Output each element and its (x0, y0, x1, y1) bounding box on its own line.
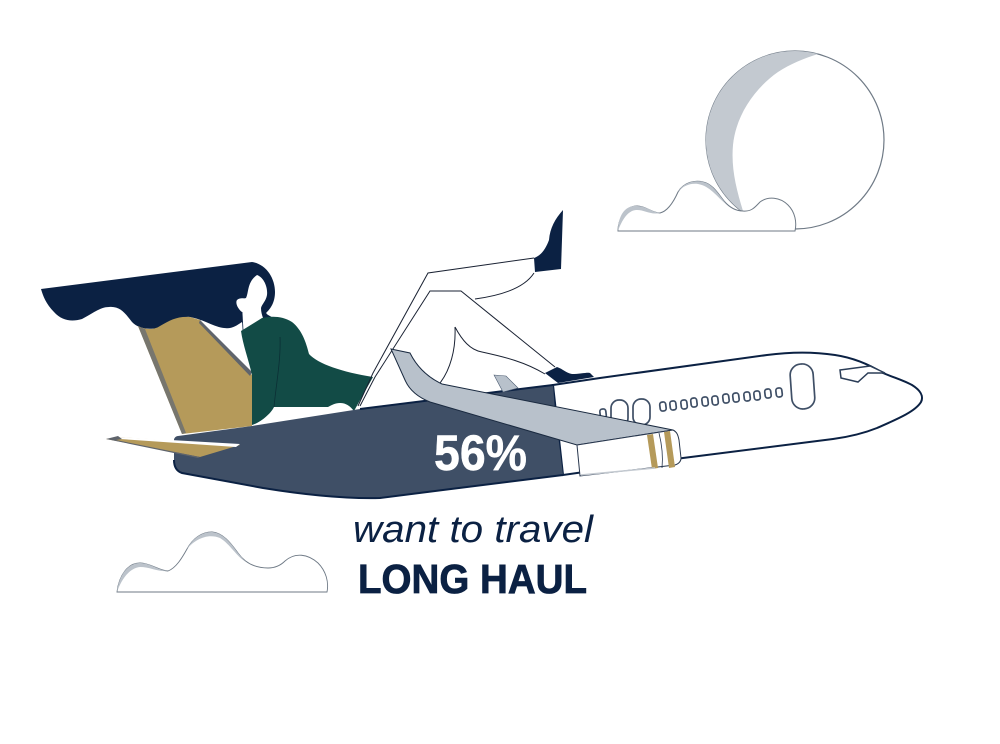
caption: long haul: LONG HAUL (358, 556, 587, 602)
percentage label: 56% (434, 425, 527, 481)
shoe: lower (545, 367, 594, 383)
fuselage underside stroke (174, 385, 563, 498)
cloud: bottom left (117, 532, 328, 592)
moon (706, 51, 884, 229)
caption: want to travel: want to travel (353, 509, 595, 551)
gold seat detail (272, 398, 290, 407)
shoe: raised (534, 210, 563, 272)
hair (41, 262, 275, 330)
doors and windows (600, 363, 816, 426)
fuselage: white forward section (553, 353, 922, 475)
far wing (494, 375, 518, 392)
face and neck (236, 275, 267, 331)
sweater (241, 317, 373, 425)
cockpit window (840, 366, 885, 382)
tail fin (138, 317, 252, 434)
legs (358, 258, 555, 406)
fuselage: navy rear section (174, 385, 563, 498)
wing (391, 349, 673, 445)
engine (577, 430, 681, 476)
cloud: top right (618, 181, 796, 231)
horizontal stabilizer (106, 436, 240, 458)
